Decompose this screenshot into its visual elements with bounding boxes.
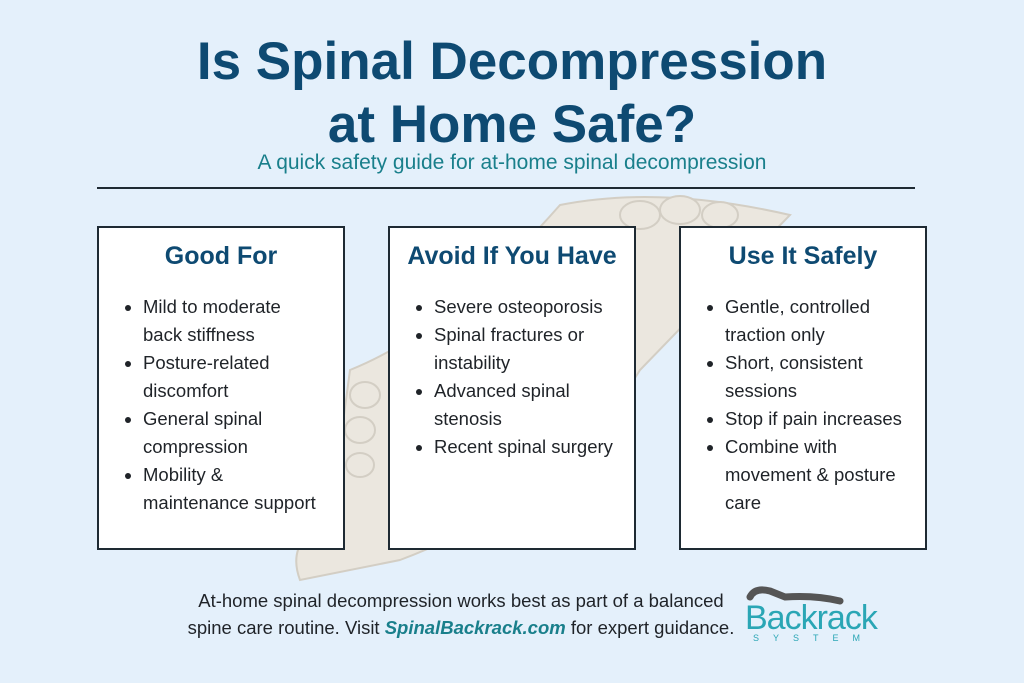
panel: avoid: Spinal fractures or bbox=[434, 324, 584, 345]
panel: use safely: traction only bbox=[725, 324, 825, 345]
panel: good for: discomfort bbox=[143, 380, 228, 401]
panel: avoid: Avoid If You Have bbox=[407, 242, 617, 270]
panel: good for: General spinal bbox=[143, 408, 262, 429]
panel: use safely: Use It Safely bbox=[729, 242, 877, 270]
panel: use safely: care bbox=[725, 492, 761, 513]
panel: avoid: Severe osteoporosis bbox=[434, 296, 603, 317]
footer text: At-home spinal decompression works best as part of a balanced bbox=[198, 590, 724, 611]
title bbox=[197, 32, 827, 154]
panel: avoid bbox=[388, 226, 636, 550]
subtitle: A quick safety guide for at-home spinal decompression bbox=[258, 151, 766, 174]
panel: use safely: sessions bbox=[725, 380, 797, 401]
logo: Backrack bbox=[745, 599, 877, 637]
panel: avoid: Recent spinal surgery bbox=[434, 436, 613, 457]
panel: good for bbox=[97, 226, 345, 550]
title: at Home Safe? bbox=[328, 95, 696, 154]
logo bbox=[745, 586, 878, 643]
panel: use safely: Stop if pain increases bbox=[725, 408, 902, 429]
panel: good for: Mobility & bbox=[143, 464, 223, 485]
panel: avoid: stenosis bbox=[434, 408, 502, 429]
panel: good for: compression bbox=[143, 436, 248, 457]
title: Is Spinal Decompression bbox=[197, 32, 827, 91]
panel: avoid: Advanced spinal bbox=[434, 380, 570, 401]
panel: use safely: Short, consistent bbox=[725, 352, 863, 373]
logo: SYSTEM bbox=[753, 633, 874, 643]
panel: good for: Posture-related bbox=[143, 352, 269, 373]
panel: good for: back stiffness bbox=[143, 324, 255, 345]
panel: good for: maintenance support bbox=[143, 492, 316, 513]
panel: good for: Mild to moderate bbox=[143, 296, 281, 317]
panel: use safely: Combine with bbox=[725, 436, 837, 457]
panel: use safely bbox=[679, 226, 927, 550]
panel: use safely: Gentle, controlled bbox=[725, 296, 870, 317]
footer text bbox=[188, 590, 734, 638]
panel: avoid: instability bbox=[434, 352, 510, 373]
panel: good for: Good For bbox=[165, 242, 277, 270]
footer text: spine care routine. Visit SpinalBackrack.com for expert guidance. bbox=[188, 617, 734, 638]
panel: use safely: movement & posture bbox=[725, 464, 896, 485]
